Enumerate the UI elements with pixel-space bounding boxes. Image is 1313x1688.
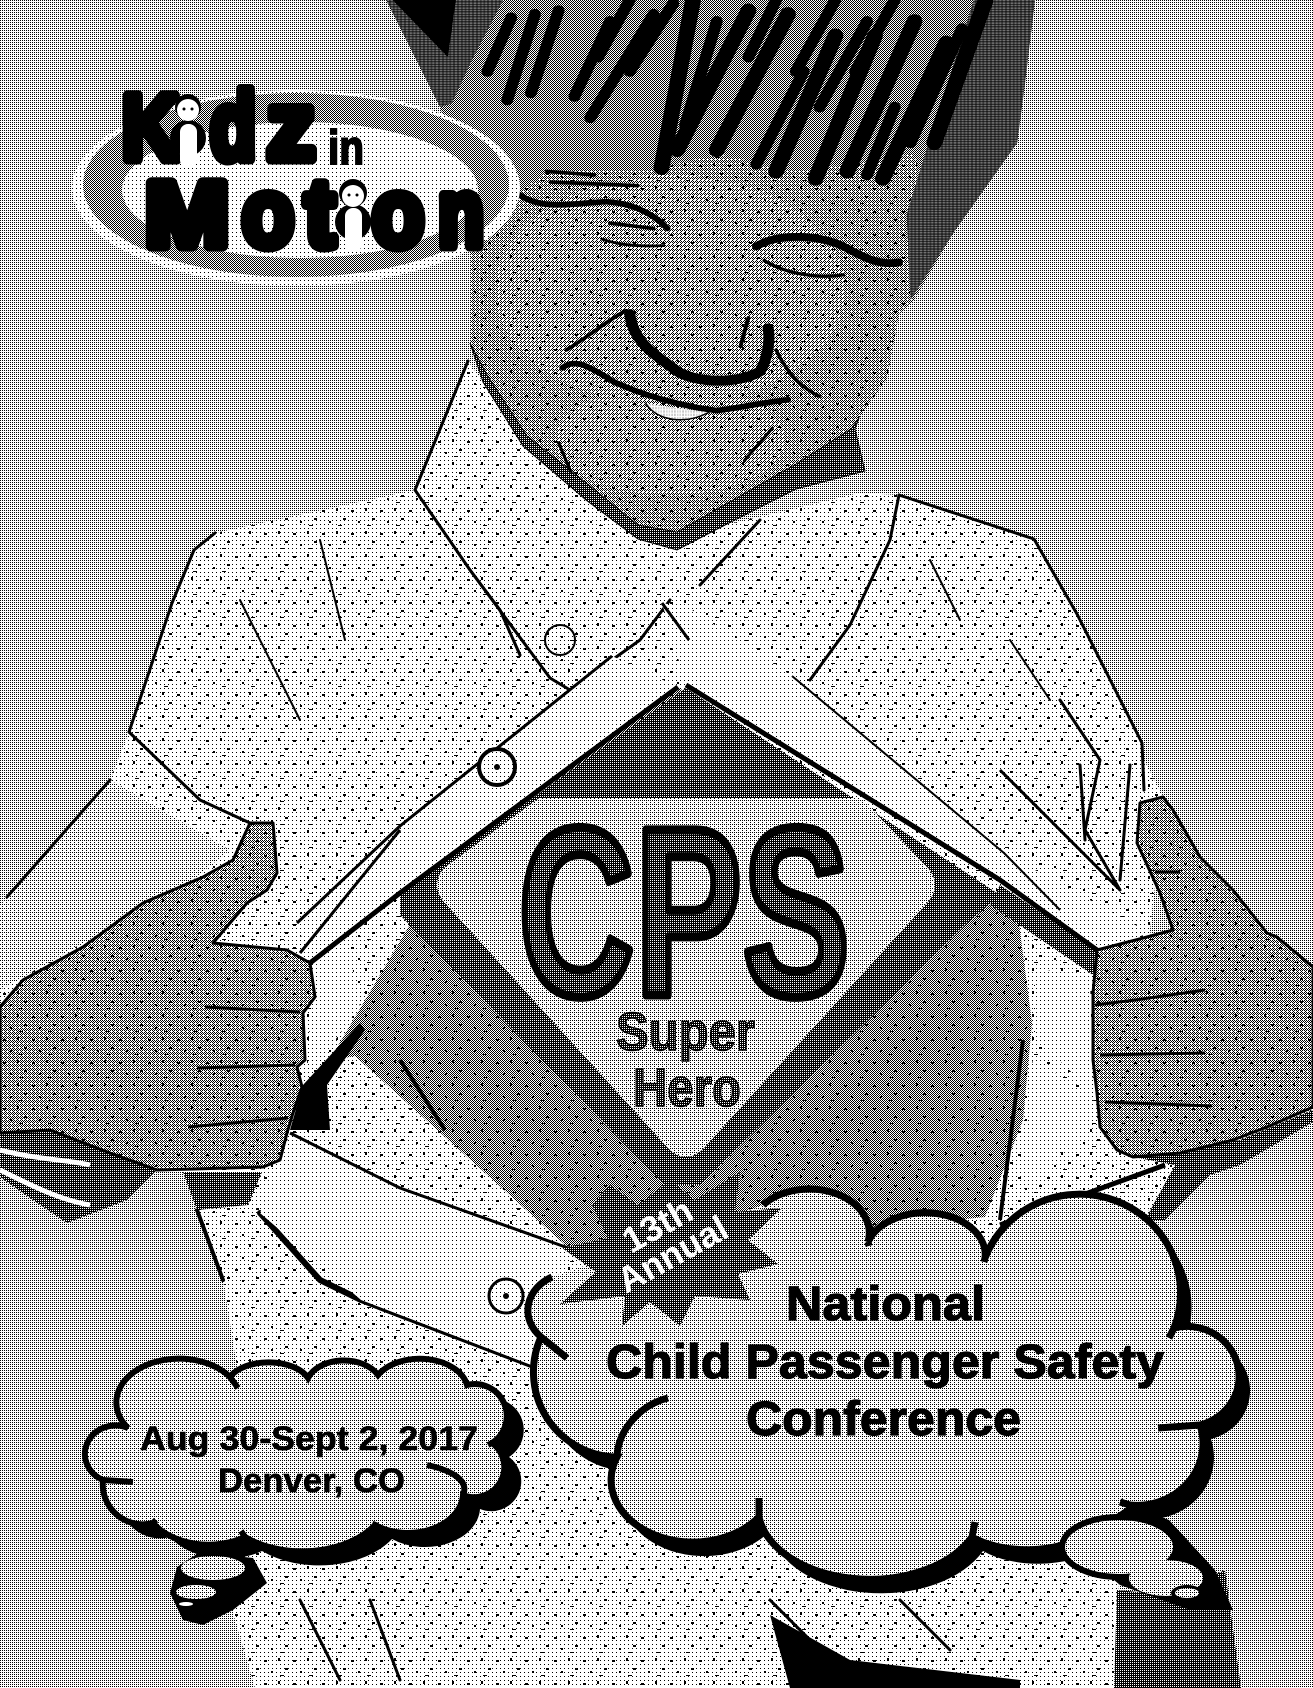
cloud outline and inner ticks [528,1189,1239,1579]
logo word Motion [145,160,484,267]
logo word Motion: M [145,164,229,266]
conference name text: National [786,1278,985,1331]
date and place text: Aug 30-Sept 2, 2017 [140,1420,478,1458]
Super Hero words: Hero [633,1058,741,1118]
logo word Motion: o [372,160,424,267]
icon: shirt button upper [479,749,515,785]
small cloud shadow [102,1373,524,1565]
logo grey ellipse [83,93,509,277]
conference name text [606,1278,1164,1446]
photo: hair streaks, eyes, nose and mouth lines [386,0,1035,471]
starburst: 13th Annual: 13th [615,1189,700,1261]
logo outer ring [72,90,520,286]
conference name text: Conference [746,1393,1021,1446]
logo word Motion: o [242,160,294,267]
Super Hero words: Super [616,1002,755,1062]
thought cloud: date and place [85,1359,524,1625]
photo: body under the shirt [183,684,1032,1260]
photo: trousers at bottom [770,1570,1241,1688]
small cloud trailing bubbles [170,1552,267,1625]
logo word Kidz: z [267,73,315,180]
emblem: CPS super hero shield [400,688,1000,1185]
logo word Kidz [122,73,315,180]
small cloud inner ticks [103,1377,492,1537]
icon: collar button [545,625,575,655]
CPS letters: CPS [518,778,850,1046]
icon: child figure as letter i in Motion [335,179,371,252]
logo word in: in [328,122,364,175]
photo: left hand and cuff [0,823,315,1223]
icon: child figure as letter i in Kidz [170,94,206,168]
logo inner light ellipse [122,122,478,258]
photo: shirt plackets pulled open [260,603,1165,1368]
date and place text: Denver, CO [218,1462,405,1500]
shield pale centre [437,798,935,1157]
date and place text [140,1420,478,1500]
photo: hair [386,0,1035,300]
shield dark diamond border [400,688,1000,1185]
photo: boy's shirt [0,361,1180,1688]
thought cloud: conference name [528,1189,1250,1610]
starburst: 13th Annual [560,1172,782,1326]
conference name text: Child Passenger Safety [606,1336,1164,1389]
Super Hero words [616,1002,755,1118]
cloud fill [528,1189,1239,1579]
cloud trailing bubbles [1062,1505,1233,1610]
logo: Kidz in Motion [72,73,520,286]
logo word Kidz: d [210,73,256,180]
photo: face [470,154,940,550]
logo word Motion: n [438,160,484,267]
cloud shadow [539,1203,1250,1593]
starburst: 13th Annual: Annual [610,1207,735,1301]
logo word Kidz: K [122,77,178,179]
photo: right hand and cuff [1093,797,1313,1220]
small cloud fill and outline [85,1359,507,1551]
icon: shirt button lower [489,1279,523,1313]
logo word Motion: t [305,160,335,267]
